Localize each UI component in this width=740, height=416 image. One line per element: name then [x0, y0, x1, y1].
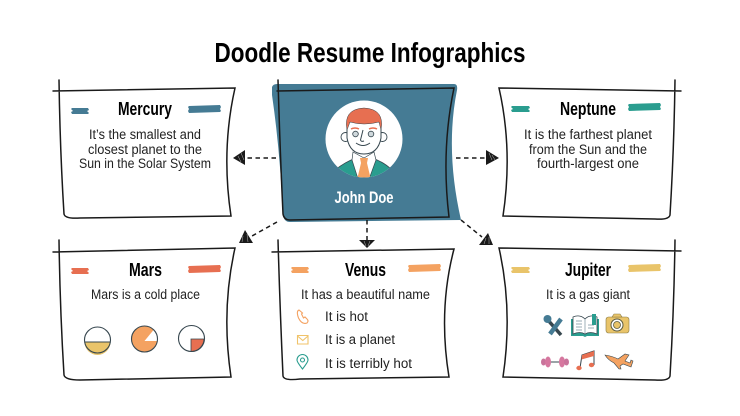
list item: It is a planet — [325, 332, 395, 347]
text block: Mars is a cold place — [91, 287, 200, 302]
text block: closest planet to the — [88, 142, 202, 157]
heading: Mercury — [118, 98, 173, 119]
brush stroke left — [511, 106, 530, 112]
avatar — [326, 100, 402, 182]
arrow: to mars — [239, 222, 277, 243]
list item: It is hot — [325, 309, 368, 324]
arrow: to venus — [359, 220, 375, 248]
brush stroke right — [408, 264, 441, 272]
brush stroke left — [511, 267, 530, 273]
chart: half pie — [84, 327, 110, 355]
panel: neptune — [499, 80, 681, 219]
brush stroke right — [188, 265, 221, 273]
blue card — [272, 84, 461, 222]
panel: mercury — [53, 80, 235, 218]
icon: music note — [576, 351, 594, 370]
heading: Jupiter — [565, 259, 611, 280]
icon: tools — [544, 315, 561, 335]
arrow: to mercury — [233, 150, 276, 165]
name: John Doe — [334, 188, 394, 207]
brush stroke left — [71, 268, 89, 274]
text block: It is a gas giant — [546, 287, 630, 302]
icon: map pin — [297, 354, 308, 369]
icon: envelope — [298, 336, 308, 344]
icon: dumbbell — [541, 356, 569, 368]
text block: It is the farthest planet — [524, 127, 652, 142]
panel: jupiter — [499, 240, 681, 380]
icon: phone — [297, 310, 308, 323]
title: Doodle Resume Infographics — [214, 37, 526, 68]
panel: venus — [272, 240, 454, 380]
icon: open book — [571, 314, 599, 337]
list item: It is terribly hot — [325, 356, 412, 371]
heading: Mars — [129, 259, 162, 280]
chart: quarter pie — [178, 326, 204, 352]
panel: central profile — [272, 80, 461, 222]
brush stroke left — [291, 267, 309, 273]
text block — [524, 127, 652, 171]
chart: mostly full pie — [132, 326, 158, 352]
brush stroke left — [71, 108, 89, 114]
heading: Venus — [345, 259, 386, 280]
brush stroke right — [628, 103, 661, 111]
arrow: to jupiter — [461, 220, 493, 245]
brush stroke right — [628, 264, 661, 272]
arrow: to neptune — [456, 150, 499, 165]
heading: Neptune — [560, 98, 616, 119]
text block — [79, 127, 211, 171]
text block: It’s the smallest and — [89, 127, 201, 142]
brush stroke right — [188, 105, 221, 113]
text block: from the Sun and the — [529, 142, 647, 157]
text block: It has a beautiful name — [301, 287, 430, 302]
icon: camera — [606, 314, 629, 333]
card outline — [277, 80, 454, 220]
icon: airplane — [605, 354, 633, 369]
panel: mars — [53, 240, 235, 380]
text block: Sun in the Solar System — [79, 156, 211, 171]
text block: fourth-largest one — [537, 156, 639, 171]
